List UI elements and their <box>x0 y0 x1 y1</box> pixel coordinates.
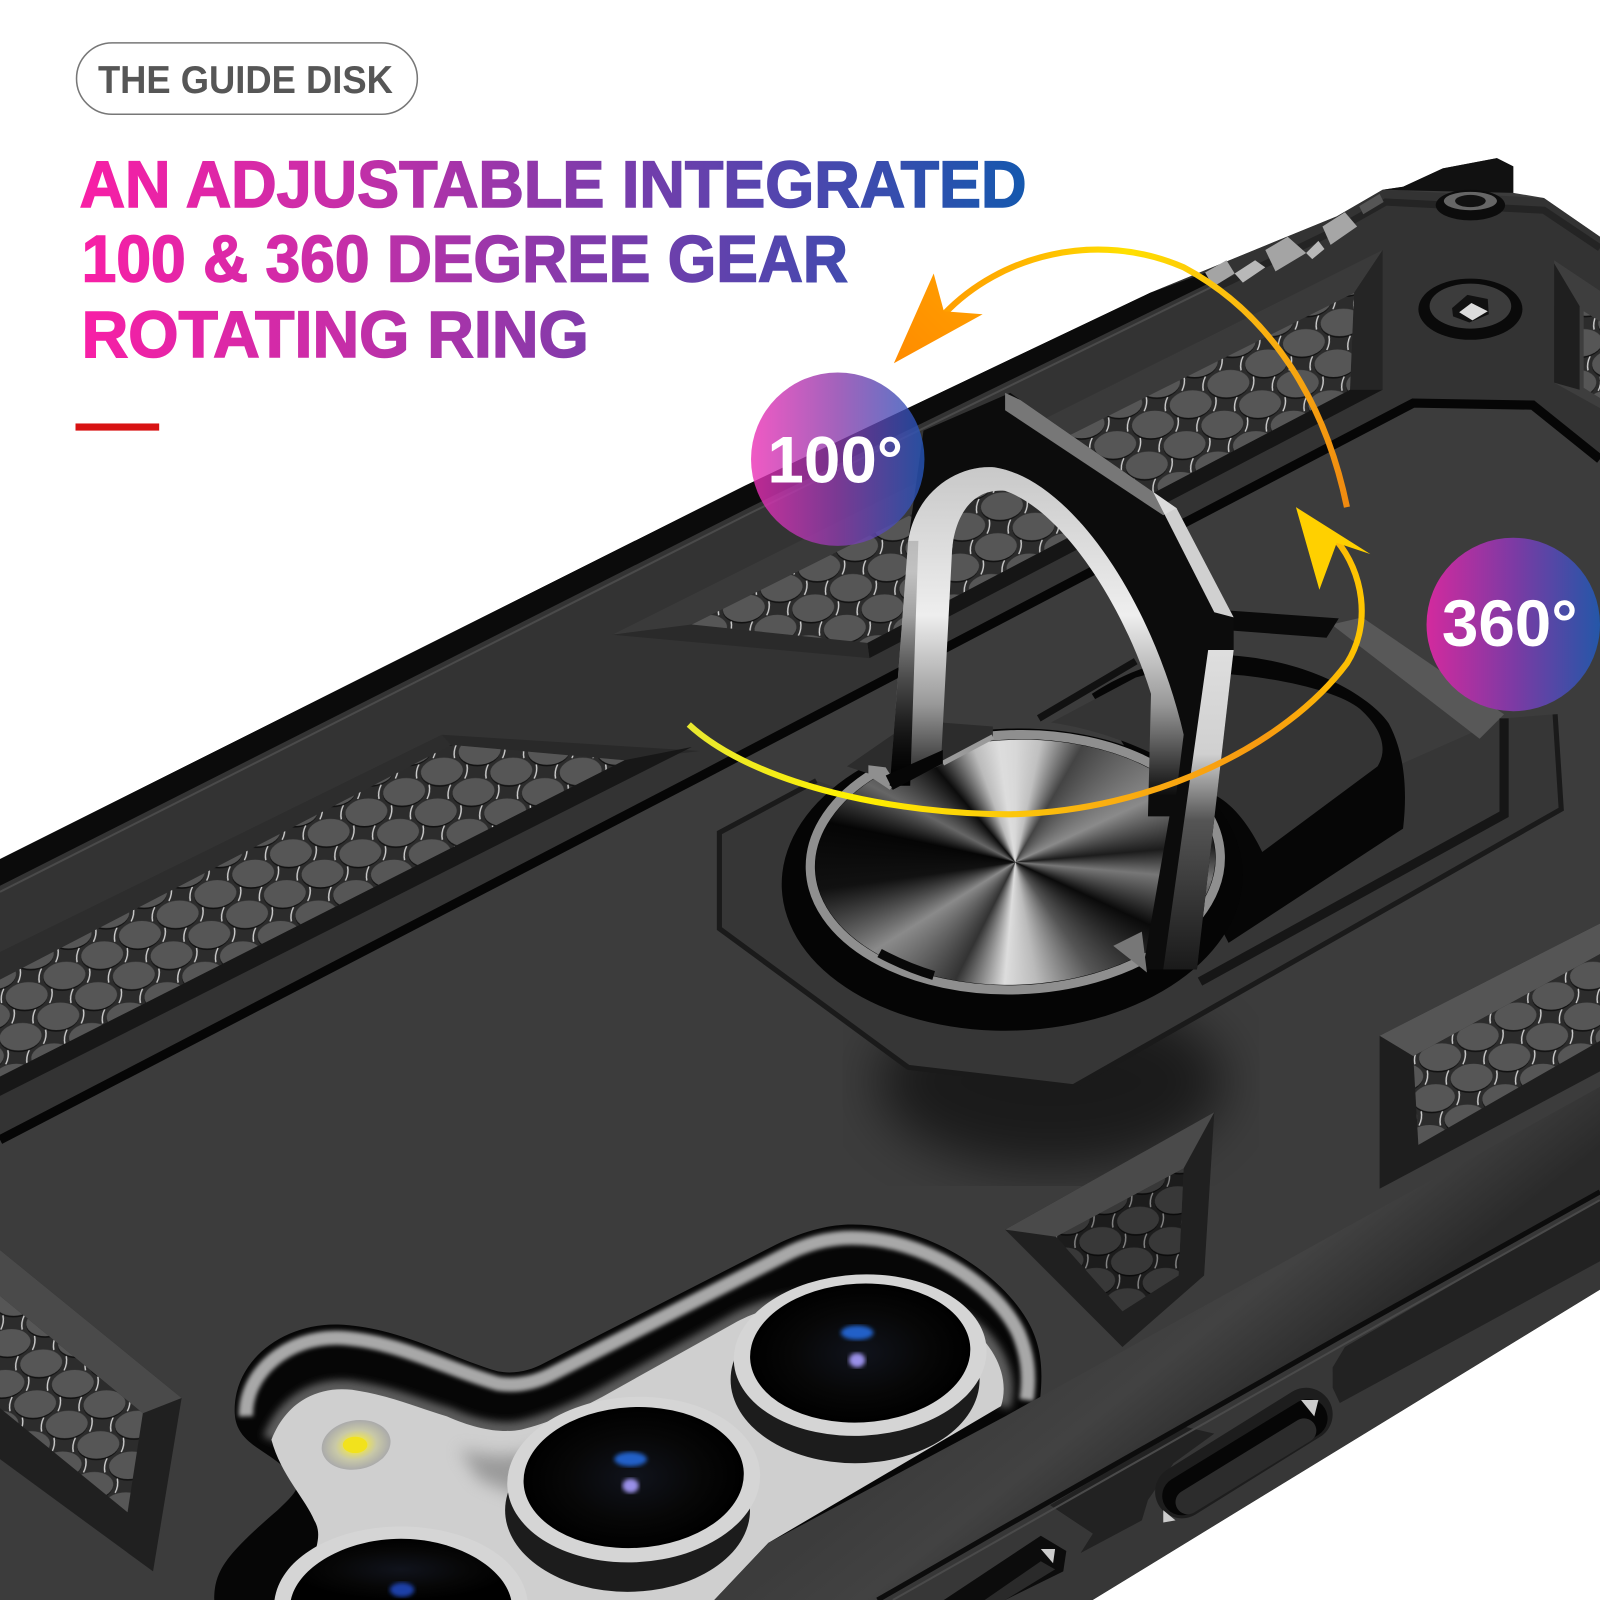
panel outline <box>0 403 1600 1140</box>
textured grip: upper strip bevel <box>612 250 1383 658</box>
conic metal disc <box>816 740 1216 985</box>
lens: upper <box>730 1268 991 1463</box>
case side band <box>714 1087 1600 1600</box>
side volume button <box>1163 1400 1318 1522</box>
disc top-left notch <box>847 720 993 976</box>
badge 360 degrees <box>1427 538 1600 711</box>
octagonal ring plate <box>719 610 1561 1087</box>
ring base D-shape <box>1039 655 1405 943</box>
small triangular grip <box>1005 1112 1214 1347</box>
flash <box>318 1415 395 1475</box>
ring disc base <box>777 721 1248 1039</box>
label pill: the guide disk: THE GUIDE DISK <box>98 59 393 102</box>
title: 100 & 360 DEGREE GEAR <box>82 223 848 297</box>
white corner <box>1093 1290 1600 1600</box>
lower right textured grip <box>1380 923 1600 1189</box>
label pill: the guide disk <box>77 43 417 114</box>
camera plate <box>271 1297 1004 1600</box>
ring outer hexagonal frame <box>908 393 1234 969</box>
title <box>80 148 1027 372</box>
title: AN ADJUSTABLE INTEGRATED <box>80 148 1027 222</box>
icon: top corner screw <box>1436 190 1505 220</box>
red accent bar <box>76 423 159 431</box>
textured grip: left strip <box>0 745 624 1077</box>
icon: hex screw <box>1418 279 1522 340</box>
textured grip: upper strip <box>692 293 1354 643</box>
right corner triangle <box>1554 260 1600 408</box>
badge 360 degrees: 360° <box>1442 587 1578 661</box>
side grip buttons on top edge <box>1205 194 1384 287</box>
badge 100 degrees <box>751 372 924 546</box>
rotation arrow 100 degree <box>894 250 1347 507</box>
camera bump <box>214 1224 1041 1600</box>
side power button <box>944 1536 1066 1600</box>
lens: middle <box>503 1390 764 1592</box>
shadow under ring <box>878 995 1224 1168</box>
plate shadow <box>459 1429 592 1500</box>
ring arch metal <box>886 467 1184 972</box>
title: ROTATING RING <box>82 298 589 372</box>
badge 100 degrees: 100° <box>767 424 903 498</box>
lens: lower <box>274 1527 528 1600</box>
bottom left grip <box>0 1250 182 1571</box>
textured grip: left strip bevel <box>0 735 700 1096</box>
rotation arrow 360 degree <box>689 507 1370 814</box>
